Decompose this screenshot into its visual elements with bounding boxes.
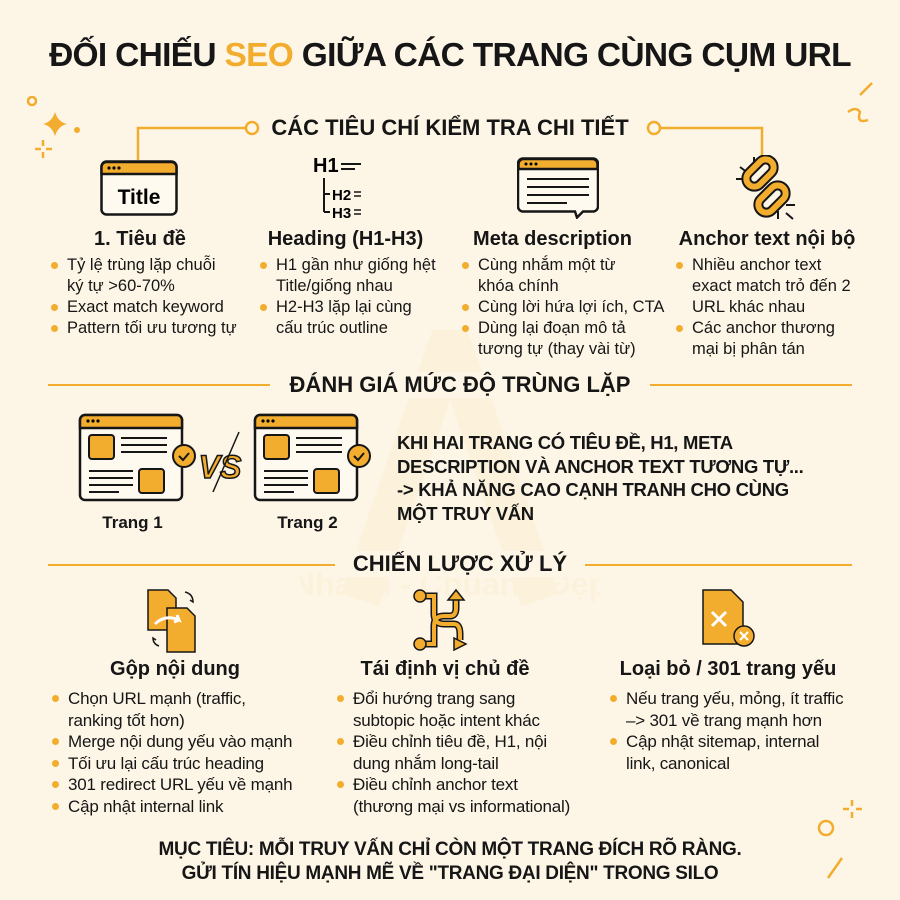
divider 2 xyxy=(48,384,852,386)
bullets: Cập nhật internal link xyxy=(68,796,223,816)
bullets: khóa chính xyxy=(478,277,559,295)
bullets: Merge nội dung yếu vào mạnh xyxy=(68,732,292,751)
conclusion text xyxy=(397,432,803,524)
bullets: Điều chỉnh tiêu đề, H1, nội xyxy=(353,732,547,751)
icon: merge files xyxy=(147,589,196,653)
title: ĐỐI CHIẾU SEO GIỮA CÁC TRANG CÙNG CỤM URL xyxy=(49,37,851,74)
column: title xyxy=(51,160,237,337)
heading: duplication: ĐÁNH GIÁ MỨC ĐỘ TRÙNG LẶP xyxy=(290,372,630,397)
conclusion text: MỘT TRUY VẤN xyxy=(397,502,534,524)
bullets: Pattern tối ưu tương tự xyxy=(67,319,237,337)
divider 3 xyxy=(48,564,852,566)
icon: heading hierarchy: H2 xyxy=(332,187,351,204)
bullets: cấu trúc outline xyxy=(276,319,388,337)
bullets xyxy=(51,255,237,337)
icon: heading hierarchy xyxy=(313,155,361,220)
conclusion text: KHI HAI TRANG CÓ TIÊU ĐỀ, H1, META xyxy=(397,432,733,453)
bullets: Đổi hướng trang sang xyxy=(353,689,515,708)
column title: Anchor text nội bộ xyxy=(679,228,855,250)
conclusion text: -> KHẢ NĂNG CAO CẠNH TRANH CHO CÙNG xyxy=(397,479,789,500)
bullets: H1 gần như giống hệt xyxy=(276,256,436,274)
bullets: Title/giống nhau xyxy=(276,277,393,295)
bullets: Dùng lại đoạn mô tả xyxy=(478,319,626,337)
bullets: Điều chỉnh anchor text xyxy=(353,775,518,794)
heading: criteria: CÁC TIÊU CHÍ KIỂM TRA CHI TIẾT xyxy=(271,115,629,140)
bullets: 301 redirect URL yếu về mạnh xyxy=(68,775,292,794)
bullets: link, canonical xyxy=(626,754,730,772)
bullets: Cùng nhắm một từ xyxy=(478,256,616,274)
icon: speech browser xyxy=(517,157,599,219)
column title: Meta description xyxy=(473,228,632,250)
column: anchor xyxy=(676,155,855,358)
bullets xyxy=(337,689,570,816)
comparison pages xyxy=(78,414,371,532)
heading: strategy: CHIẾN LƯỢC XỬ LÝ xyxy=(353,551,567,576)
label: Trang 1: Trang 1 xyxy=(102,513,163,532)
icon: diverging arrows xyxy=(413,588,468,652)
bullets: URL khác nhau xyxy=(692,298,805,316)
bullets: Nhiều anchor text xyxy=(692,256,821,274)
label: Trang 2: Trang 2 xyxy=(277,513,338,532)
footer goal: GỬI TÍN HIỆU MẠNH MẼ VỀ "TRANG ĐẠI DIỆN" TRONG SILO xyxy=(182,863,718,884)
bullets: Các anchor thương xyxy=(692,319,835,337)
bullets xyxy=(610,689,844,772)
bullets: ranking tốt hơn) xyxy=(68,710,185,730)
column title: Heading (H1-H3) xyxy=(268,228,423,250)
bullets: Exact match keyword xyxy=(67,298,224,316)
bullets: mại bị phân tán xyxy=(692,340,805,358)
bullets: H2-H3 lặp lại cùng xyxy=(276,298,412,316)
column title: 1. Tiêu đề xyxy=(94,228,186,250)
connector lines section 1 xyxy=(136,120,764,160)
bullets: exact match trỏ đến 2 xyxy=(692,277,851,295)
watermark logo xyxy=(300,330,600,606)
strategy: remove xyxy=(610,589,844,772)
bullets: tương tự (thay vài từ) xyxy=(478,340,636,358)
conclusion text: DESCRIPTION VÀ ANCHOR TEXT TƯƠNG TỰ... xyxy=(397,456,803,476)
strategy title: Gộp nội dung xyxy=(110,658,240,680)
bullets xyxy=(676,256,851,358)
icon: file with x xyxy=(702,589,755,647)
strategy: merge xyxy=(52,589,292,816)
icon: title browser: Title xyxy=(118,186,160,209)
strategy title: Loại bỏ / 301 trang yếu xyxy=(620,658,836,680)
bullets: Nếu trang yếu, mỏng, ít traffic xyxy=(626,689,843,708)
comparison pages: VS xyxy=(199,449,242,485)
bullets: –> 301 về trang mạnh hơn xyxy=(626,710,822,730)
icon: broken link xyxy=(736,155,795,220)
bullets: Cập nhật sitemap, internal xyxy=(626,732,819,751)
strategy: reposition xyxy=(337,588,570,816)
bullets: Tỷ lệ trùng lặp chuỗi xyxy=(67,256,216,274)
bullets: ký tự >60-70% xyxy=(67,277,175,295)
column: meta xyxy=(462,157,664,358)
footer goal xyxy=(158,837,742,884)
icon: heading hierarchy: H1 xyxy=(313,155,339,177)
bullets xyxy=(52,689,292,816)
icon: title browser xyxy=(100,160,178,216)
bullets: (thương mại vs informational) xyxy=(353,796,570,816)
bullets: Tối ưu lại cấu trúc heading xyxy=(68,754,264,772)
footer goal: MỤC TIÊU: MỖI TRUY VẤN CHỈ CÒN MỘT TRANG ĐÍCH RÕ RÀNG. xyxy=(158,839,742,860)
strategy title: Tái định vị chủ đề xyxy=(361,658,529,680)
bullets: Chọn URL mạnh (traffic, xyxy=(68,689,246,708)
bullets: subtopic hoặc intent khác xyxy=(353,710,540,730)
bullets xyxy=(462,255,664,358)
bullets xyxy=(260,256,436,337)
bullets: dung nhắm long-tail xyxy=(353,754,499,772)
bullets: Cùng lời hứa lợi ích, CTA xyxy=(478,298,664,316)
column: heading xyxy=(260,155,436,337)
